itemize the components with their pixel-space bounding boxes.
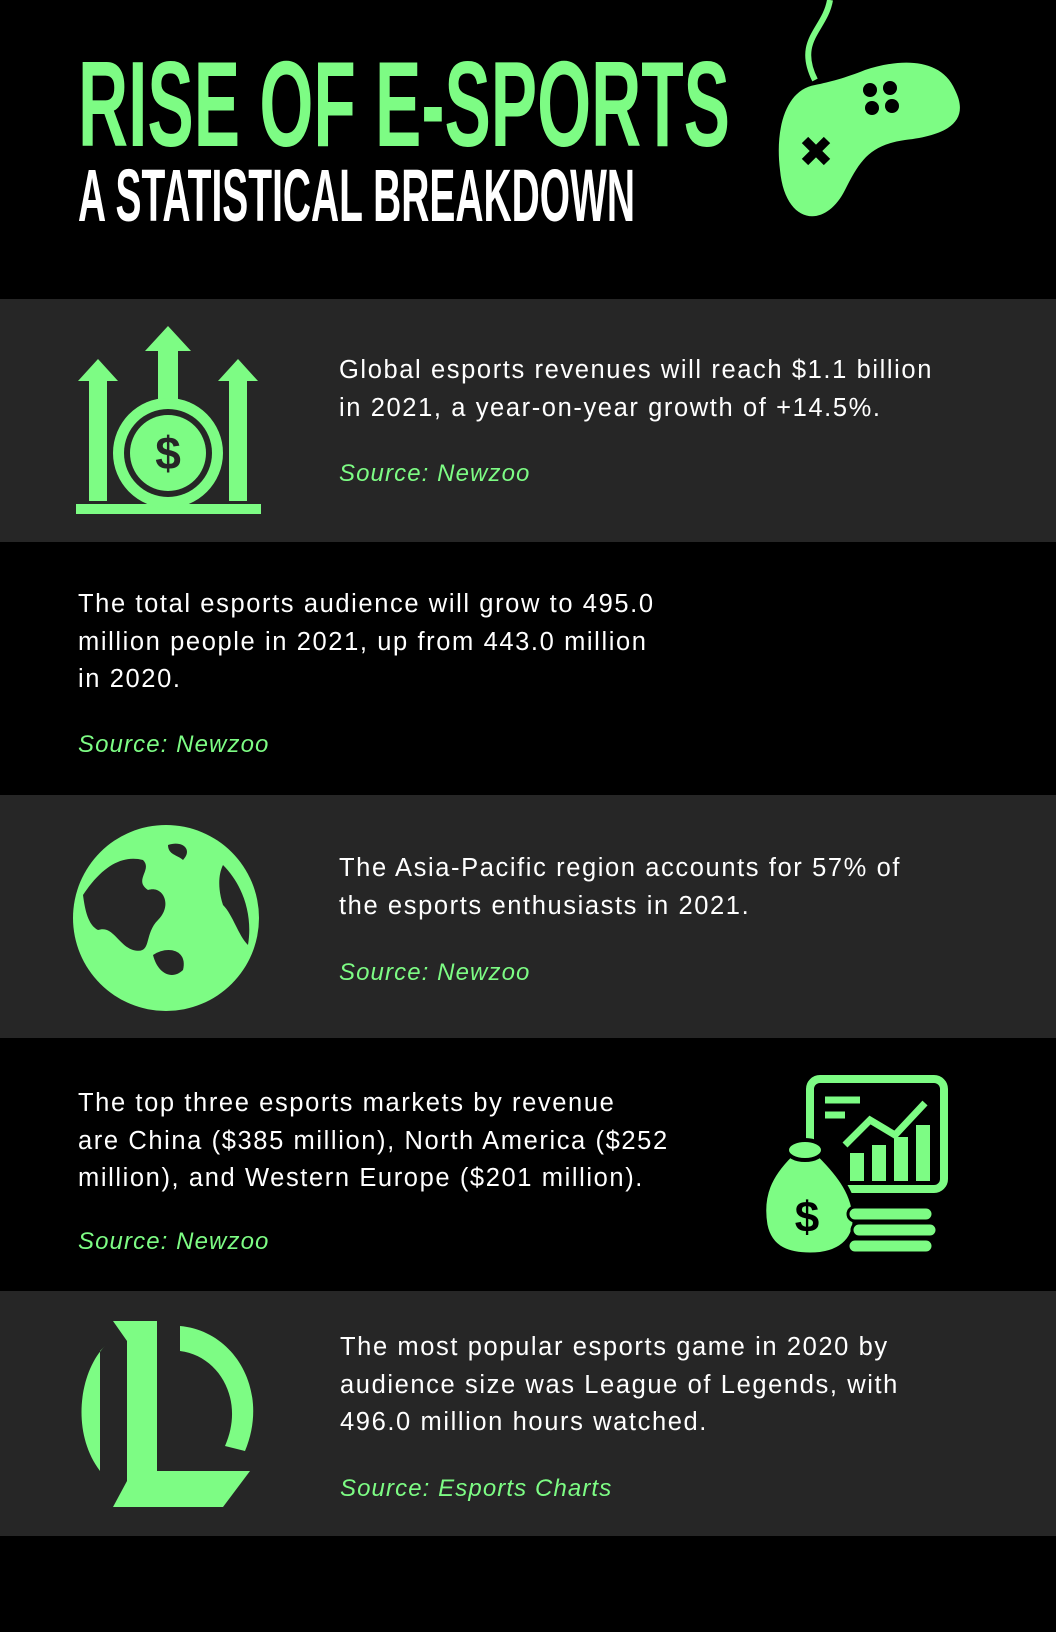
text: revenue: Global esports revenues will reach $1.1 billion [339,356,933,384]
text: markets [78,1089,669,1192]
text: audience: in 2020. [78,665,182,693]
text: audience: million people in 2021, up from 443.0 million [78,628,648,656]
text: audience [78,590,655,693]
source: Source: Esports Charts [340,1475,612,1502]
text: popular game [340,1333,899,1436]
text: markets: million), and Western Europe ($201 million). [78,1164,644,1192]
text: asia-pacific: the esports enthusiasts in 2021. [339,892,750,920]
text: popular game: The most popular esports game in 2020 by [340,1333,889,1361]
icon: revenue growth [76,326,261,514]
source: Source: Newzoo [78,731,270,758]
text: markets: The top three esports markets by revenue [78,1089,615,1117]
text: audience: The total esports audience will grow to 495.0 [78,590,655,618]
panel: league of legends [0,1291,1056,1536]
panel: top markets [78,1075,948,1255]
source: Source: Newzoo [339,959,530,986]
icon: globe [73,825,259,1011]
panel: audience [78,590,655,758]
text: revenue: in 2021, a year-on-year growth of +14.5%. [339,394,882,422]
icon: game controller [778,0,960,216]
source: Source: Newzoo [339,460,530,487]
text: revenue [339,356,933,422]
title block [78,36,730,237]
icon: money bag and chart [766,1075,948,1252]
text: markets: are China ($385 million), North America ($252 [78,1126,669,1154]
text: popular game: audience size was League of Legends, with [340,1370,899,1398]
text: asia-pacific [339,854,901,920]
icon: league of legends logo [82,1321,254,1507]
icon: revenue growth: $ [155,427,181,479]
icon: money bag and chart: $ [795,1193,819,1242]
text: asia-pacific: The Asia-Pacific region accounts for 57% of [339,854,901,882]
text: popular game: 496.0 million hours watched. [340,1408,708,1436]
panel: revenue [0,299,1056,542]
panel: asia-pacific [0,795,1056,1038]
source: Source: Newzoo [78,1228,270,1255]
